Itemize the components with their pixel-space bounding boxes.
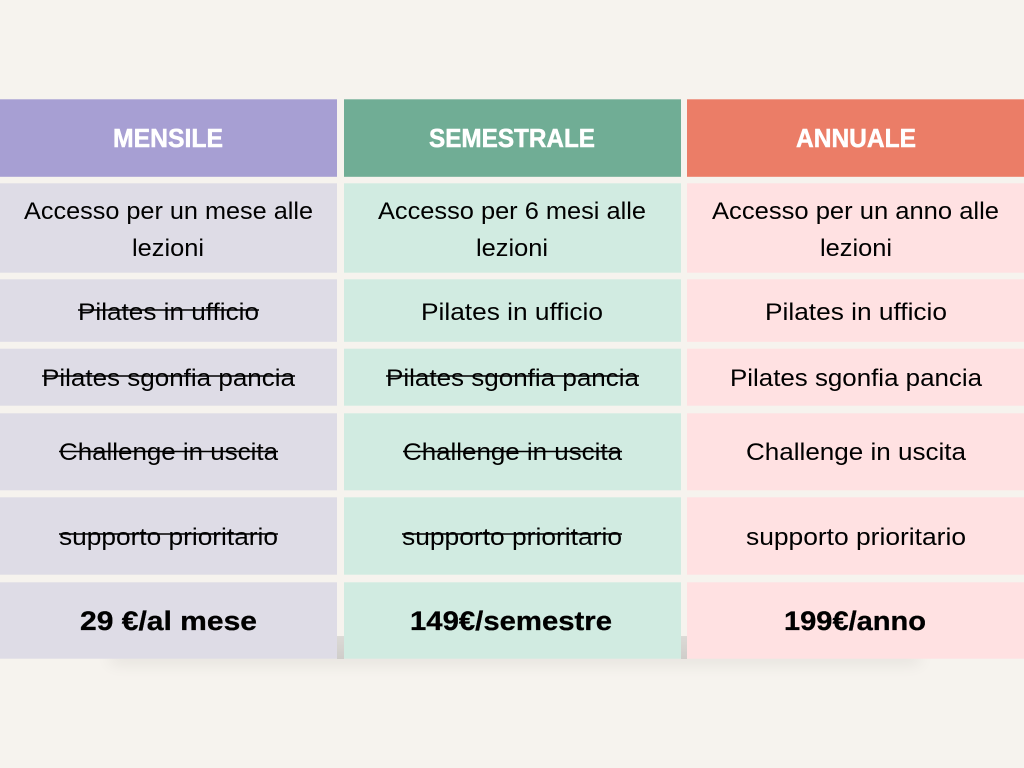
row: pilates sgonfia pancia, crossed out [344,349,681,406]
panel: semestrale column [344,99,681,659]
row: accesso mensile [0,183,337,273]
row: pilates in ufficio, crossed out: Pilates in ufficio [78,299,259,326]
row: supporto prioritario: supporto prioritario [746,524,966,551]
price: mensile [0,582,337,659]
row: pilates sgonfia pancia, crossed out: Pilates sgonfia pancia [386,365,640,392]
row: supporto prioritario [687,497,1024,575]
price: semestrale: 149€/semestre [410,606,612,636]
panel: annuale column [687,99,1024,659]
row: accesso semestrale: lezioni [476,235,548,262]
row: accesso mensile: lezioni [132,235,204,262]
table shadow [110,636,920,664]
row: pilates sgonfia pancia, crossed out: Pilates sgonfia pancia [42,365,296,392]
row: pilates in ufficio [687,279,1024,342]
row: pilates in ufficio, crossed out [0,279,337,342]
row: supporto prioritario, crossed out [0,497,337,575]
row: challenge in uscita, crossed out [0,413,337,490]
row: accesso annuale: Accesso per un anno alle [712,198,999,225]
row: pilates in ufficio: Pilates in ufficio [765,299,947,326]
row: accesso annuale [687,183,1024,273]
row: challenge in uscita, crossed out [344,413,681,490]
row: pilates sgonfia pancia: Pilates sgonfia pancia [730,365,983,392]
row: pilates sgonfia pancia [687,349,1024,406]
row: challenge in uscita, crossed out: Challenge in uscita [403,439,623,466]
row: challenge in uscita: Challenge in uscita [746,439,967,466]
header: semestrale [344,99,681,177]
row: accesso mensile: Accesso per un mese alle [24,198,313,225]
header: mensile [0,99,337,177]
price: mensile: 29 €/al mese [80,606,257,636]
header: semestrale: SEMESTRALE [429,123,595,153]
row: pilates sgonfia pancia, crossed out [0,349,337,406]
row: challenge in uscita [687,413,1024,490]
price: semestrale [344,582,681,659]
header: mensile: MENSILE [113,123,223,153]
header: annuale [687,99,1024,177]
row: accesso semestrale [344,183,681,273]
price: annuale [687,582,1024,659]
row: supporto prioritario, crossed out [344,497,681,575]
row: supporto prioritario, crossed out: supporto prioritario [59,524,278,551]
header: annuale: ANNUALE [796,123,916,153]
row: accesso annuale: lezioni [820,235,892,262]
row: supporto prioritario, crossed out: supporto prioritario [402,524,622,551]
row: pilates in ufficio: Pilates in ufficio [421,299,603,326]
row: challenge in uscita, crossed out: Challenge in uscita [59,439,279,466]
price: annuale: 199€/anno [784,606,926,636]
row: pilates in ufficio [344,279,681,342]
row: accesso semestrale: Accesso per 6 mesi alle [378,198,646,225]
panel: mensile column [0,99,337,659]
